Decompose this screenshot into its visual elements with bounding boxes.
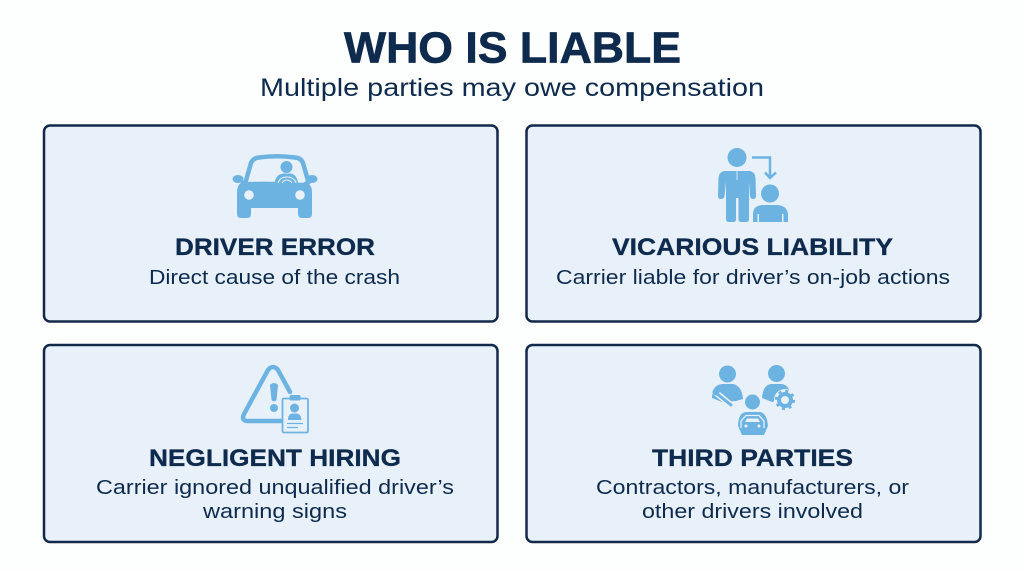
description xyxy=(596,477,909,523)
heading: VICARIOUS LIABILITY xyxy=(612,234,893,261)
subtitle: Multiple parties may owe compensation xyxy=(260,74,764,102)
heading: DRIVER ERROR xyxy=(175,234,375,261)
icon: supervisor and employee xyxy=(718,148,788,222)
panel: negligent hiring xyxy=(44,345,498,542)
description: Carrier liable for driver’s on-job actions xyxy=(556,267,950,289)
description: Contractors, manufacturers, or xyxy=(596,477,909,499)
heading: THIRD PARTIES xyxy=(652,445,853,472)
panel: driver error xyxy=(44,126,498,322)
panel: vicarious liability xyxy=(526,126,980,322)
icon: three people with wrench, gear and car xyxy=(712,365,796,435)
heading: NEGLIGENT HIRING xyxy=(149,445,401,472)
panel: third parties xyxy=(526,345,980,542)
title: WHO IS LIABLE xyxy=(344,24,681,72)
icon: warning triangle with clipboard xyxy=(243,367,308,432)
description xyxy=(96,477,454,523)
description: Direct cause of the crash xyxy=(149,267,400,289)
description: warning signs xyxy=(202,501,347,523)
icon: car with driver xyxy=(232,156,318,218)
description: other drivers involved xyxy=(642,501,863,523)
description: Carrier ignored unqualified driver’s xyxy=(96,477,454,499)
